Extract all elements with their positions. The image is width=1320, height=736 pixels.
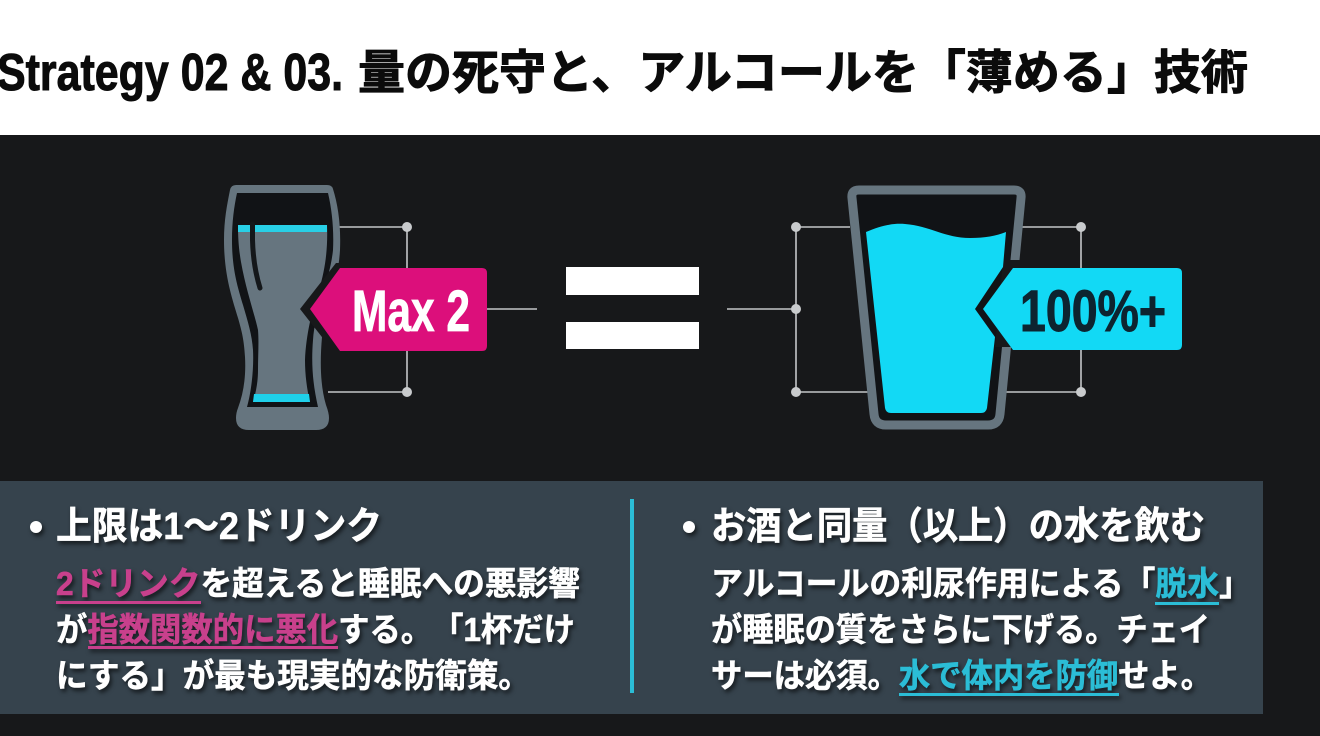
connector lines: water [727,222,1086,397]
body line 1: アルコールの利尿作用による「脱水」 [711,565,1251,602]
callout: Max 2: Max 2 [352,279,470,344]
callout: Max 2 [300,263,487,355]
icon: beer glass [224,185,340,430]
icon: water glass [852,190,1035,425]
underline: protect with water [899,693,1119,696]
underline: 2 drinks [56,601,201,604]
body line 3: にする」が最も現実的な防衛策。 [56,657,530,694]
water fill [866,224,1006,413]
bullet [30,521,42,533]
panel: text panel [0,481,1263,714]
body line 3: サーは必須。水で体内を防御せよ。 [711,657,1212,694]
heading: drink water: お酒と同量（以上）の水を飲む [711,506,1205,548]
block: upper limit [30,506,580,694]
beer top level line [238,225,327,232]
title band [0,0,1320,135]
beer bottom level line [253,394,310,402]
callout: 100%+ [983,268,1182,350]
block: drink water [683,506,1251,696]
equals sign [566,267,699,349]
body line 2: が睡眠の質をさらに下げる。チェイ [711,611,1210,648]
body line 1: 2ドリンクを超えると睡眠への悪影響 [56,565,580,602]
title: Japanese heading: 量の死守と、アルコールを「薄める」技術 [358,46,1248,99]
heading: upper limit: 上限は1〜2ドリンク [56,506,382,548]
underline: exponential [88,646,338,649]
glass gap behind callout [995,260,1035,347]
callout: 100%+: 100%+ [1020,279,1166,344]
body line 2: が指数関数的に悪化する。「1杯だけ [56,611,575,648]
title: strategy number: Strategy 02 & 03. [0,44,343,102]
glass highlight [252,224,260,288]
bullet [683,521,695,533]
underline: dehydration [1155,602,1219,605]
connector lines: beer [328,222,537,397]
divider [630,499,634,693]
